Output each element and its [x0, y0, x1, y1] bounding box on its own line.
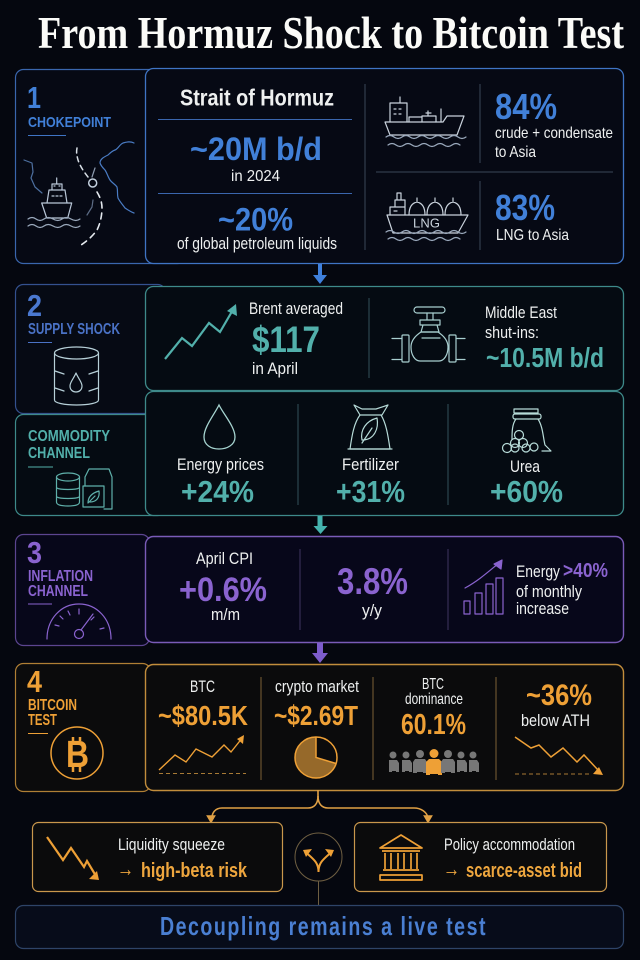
- text: decoupling: Decoupling remains a live test: [160, 911, 487, 941]
- caption: below ATH: below ATH: [521, 712, 590, 730]
- icon: barrels and bag: [56, 469, 112, 509]
- text: energy: Energy: [516, 563, 561, 581]
- icon: energy drop: [204, 405, 235, 449]
- icon: urea sack: [502, 409, 551, 452]
- text: middle east: Middle East: [485, 304, 557, 322]
- text: shut-ins: shut-ins:: [485, 324, 539, 342]
- panel: commodity stats: [146, 392, 624, 516]
- caption: in april: in April: [252, 360, 298, 378]
- panel: commodity channel: [16, 414, 166, 516]
- text: brent averaged: Brent averaged: [249, 300, 343, 318]
- arrow: inflation to bitcoin: [312, 643, 328, 663]
- stat: $2.69T: ~$2.69T: [274, 700, 358, 731]
- icon: falling arrow: [47, 837, 99, 880]
- text: liquidity squeeze: Liquidity squeeze: [118, 836, 225, 854]
- label: channel: CHANNEL: [28, 445, 90, 462]
- icon: LNG carrier: [386, 193, 468, 240]
- arrow glyph: liquidity: →: [117, 856, 134, 881]
- caption: LNG to Asia: LNG to Asia: [496, 227, 569, 244]
- text: btc: BTC: [422, 676, 444, 693]
- arrow: commodity to inflation: [314, 516, 328, 534]
- icon: fertilizer bag: [348, 405, 392, 449]
- stat: >40%: >40%: [563, 560, 608, 582]
- chart: market pie: [295, 737, 337, 778]
- arrow glyph: policy: →: [443, 856, 460, 881]
- stat: +0.6%: +0.6%: [179, 571, 267, 609]
- panel: liquidity squeeze: [32, 822, 282, 892]
- text: energy prices: Energy prices: [177, 456, 264, 474]
- icon: diverging paths: [295, 833, 342, 881]
- stat: 20M b/d: ~20M b/d: [190, 131, 322, 167]
- icon: gauge: [47, 604, 111, 639]
- arrow: branching connector: [208, 790, 432, 822]
- stat: 10.5M b/d: ~10.5M b/d: [486, 342, 604, 373]
- label: commodity: COMMODITY: [28, 428, 111, 445]
- panel: supply shock: [16, 284, 166, 414]
- icon: strait map with ship: [24, 142, 134, 247]
- icon: rising bars: [464, 560, 503, 614]
- stat: 3.8%: 3.8%: [337, 561, 408, 602]
- stat: 60.1%: 60.1%: [401, 709, 466, 741]
- stat: 20%: ~20%: [218, 202, 293, 238]
- caption: in 2024: in 2024: [231, 168, 280, 185]
- label: inflation: INFLATION: [28, 568, 93, 585]
- text: scarce-asset bid: scarce-asset bid: [466, 859, 582, 882]
- caption: to Asia: to Asia: [495, 144, 536, 161]
- stat: +60%: +60%: [490, 474, 563, 509]
- icon: bitcoin coin: [51, 727, 103, 779]
- caption: y/y: y/y: [362, 602, 383, 620]
- stat: 36%: ~36%: [526, 679, 592, 712]
- stat: 84%: 84%: [495, 86, 557, 127]
- caption: petroleum liquids: of global petroleum liquids: [177, 235, 337, 253]
- LNG tag: LNG: [413, 216, 440, 230]
- icon: rising trend arrow: [165, 304, 237, 359]
- label: channel: CHANNEL: [28, 583, 88, 600]
- icon: valve: [392, 307, 465, 362]
- step number 3: 3: [27, 535, 42, 570]
- panel: bitcoin test: [16, 664, 624, 792]
- stat: +24%: +24%: [181, 474, 254, 509]
- text: of monthly: of monthly: [516, 583, 583, 601]
- label: chokepoint: CHOKEPOINT: [28, 114, 111, 131]
- panel: brent and shut-ins: [146, 286, 624, 390]
- text: urea: Urea: [510, 458, 541, 476]
- label: test: TEST: [28, 712, 57, 729]
- step number 1: 1: [27, 80, 41, 115]
- step number 2: 2: [27, 288, 42, 323]
- icon: crude tanker: [385, 97, 466, 146]
- panel: policy accommodation: [354, 822, 606, 892]
- stat: $80.5K: ~$80.5K: [158, 700, 248, 731]
- text: high-beta risk: high-beta risk: [141, 859, 247, 882]
- heading: strait of hormuz: Strait of Hormuz: [180, 84, 334, 110]
- text: BTC: BTC: [190, 678, 215, 696]
- text: april cpi: April CPI: [196, 549, 253, 568]
- icon: bitcoin coin: B: [66, 734, 89, 776]
- text: dominance: dominance: [405, 691, 463, 708]
- chart: btc sparkline: [159, 735, 246, 774]
- step number 4: 4: [27, 664, 43, 699]
- stat: +31%: +31%: [336, 474, 405, 509]
- label: bitcoin: BITCOIN: [28, 697, 77, 714]
- panel: chokepoint: [16, 68, 624, 264]
- panel: inflation channel: [16, 534, 624, 646]
- caption: crude + condensate: crude + condensate: [495, 125, 613, 142]
- label: supply shock: SUPPLY SHOCK: [28, 321, 121, 338]
- stat: $117: $117: [252, 319, 320, 360]
- caption: m/m: m/m: [211, 606, 240, 624]
- icon: oil barrel: [54, 347, 98, 405]
- text: crypto market: crypto market: [275, 678, 359, 696]
- arrow: chokepoint to supply shock: [313, 264, 327, 284]
- icon: bank building: [380, 835, 422, 880]
- text: policy accommodation: Policy accommodation: [444, 836, 575, 854]
- stat: 83%: 83%: [495, 187, 555, 228]
- icon: people row: [389, 749, 479, 775]
- text: increase: increase: [516, 600, 569, 618]
- chart: falling sparkline: [515, 737, 603, 775]
- panel: conclusion banner: [16, 906, 624, 948]
- text: fertilizer: Fertilizer: [342, 456, 399, 474]
